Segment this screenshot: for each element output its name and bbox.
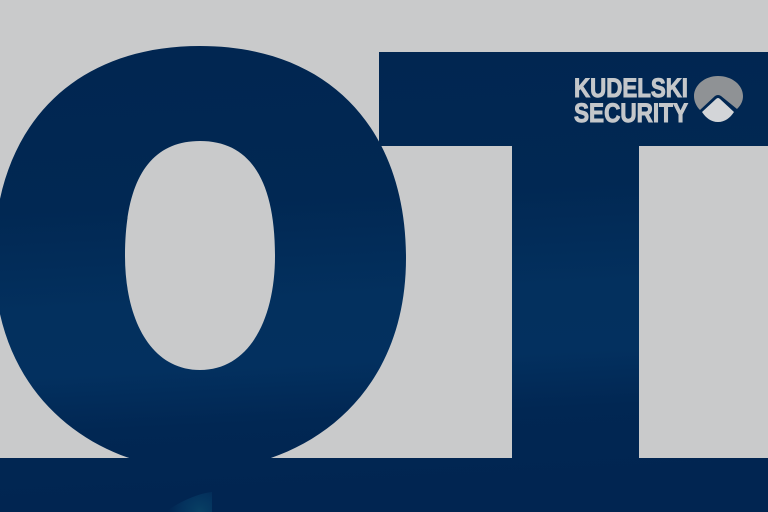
- letter O: [0, 46, 406, 470]
- letter T: [379, 52, 768, 460]
- logo mark: [694, 76, 743, 122]
- logo wordmark: SECURITY: [574, 98, 688, 128]
- bottom band: [0, 458, 768, 512]
- logo wordmark: KUDELSKI: [574, 73, 688, 103]
- logo wordmark: [574, 73, 688, 128]
- logo: Kudelski Security: [574, 73, 743, 128]
